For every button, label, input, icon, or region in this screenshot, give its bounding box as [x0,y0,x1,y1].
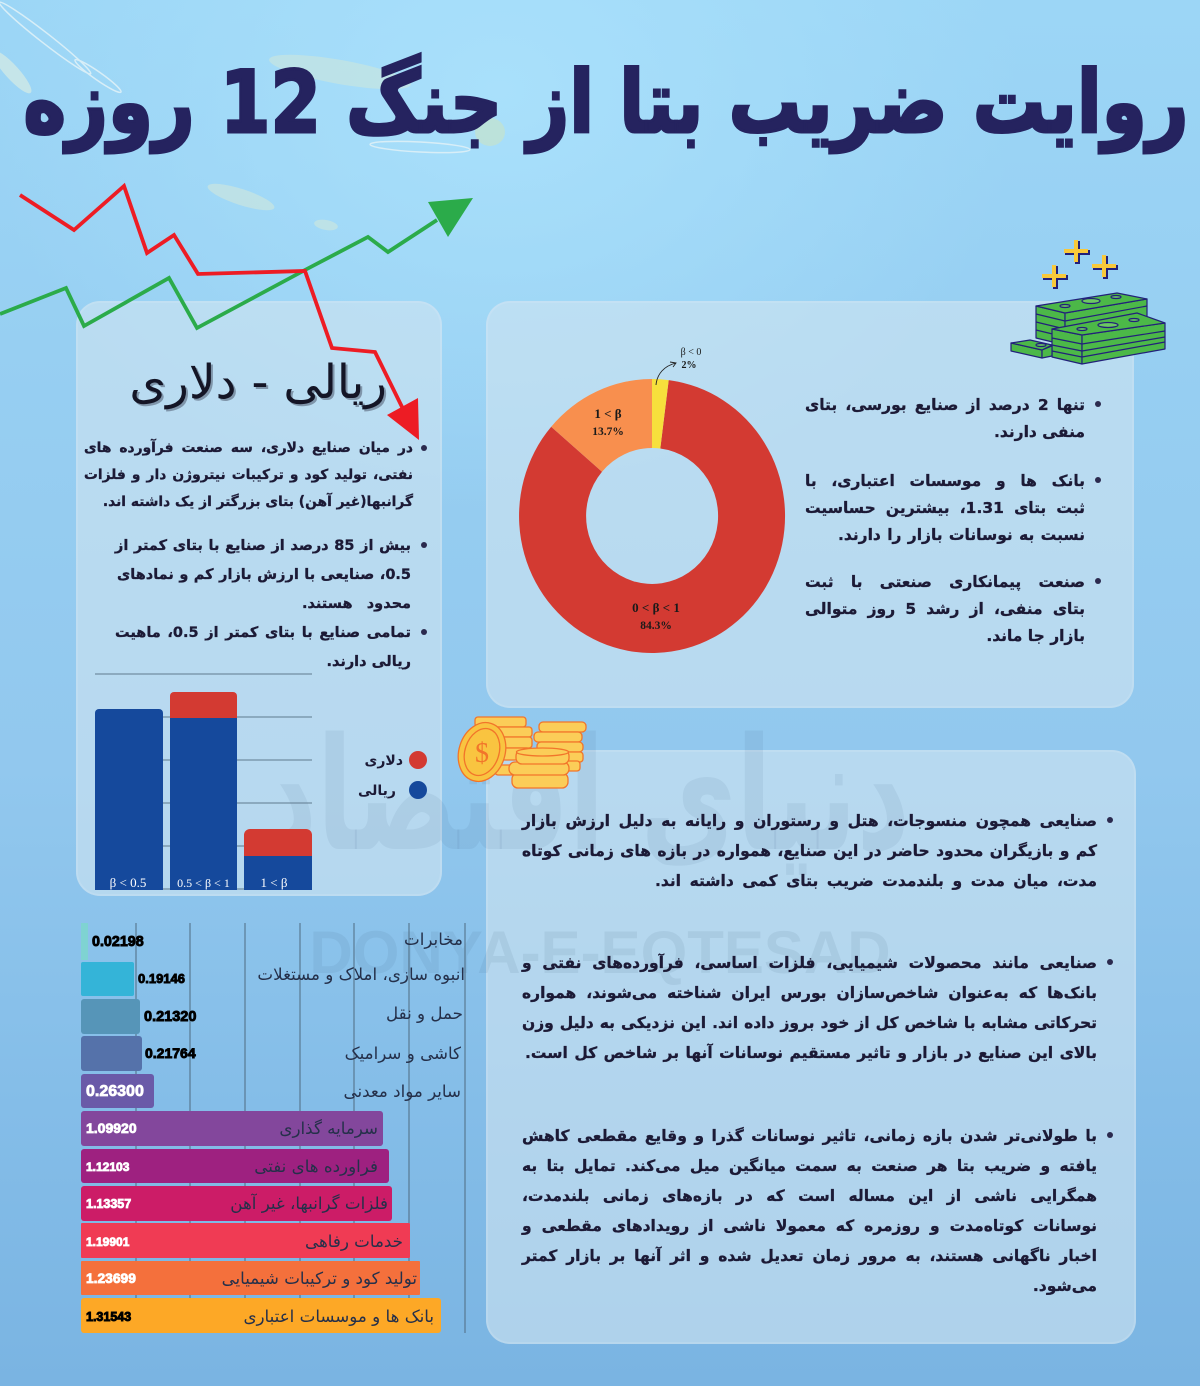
bar: banks and credit institutions [81,1298,441,1333]
paragraph: index heavyweights: صنایعی مانند محصولات شیمیایی، فلزات اساسی، فرآورده‌های نفتی و [522,954,1097,972]
bullet: contracting: صنعت پیمانکاری صنعتی با ثبت [805,573,1085,591]
paragraph: low beta sectors: صنایعی همچون منسوجات، هتل و رستوران و رایانه به دلیل ارزش بازار [522,812,1097,830]
bar: investment: سرمایه گذاری [279,1118,378,1138]
bullet: contracting: بتای منفی، از رشد 5 روز متوالی [805,600,1085,618]
bullet: contracting [805,573,1085,646]
bullet: low beta share: بیش از 85 درصد از صنایع با بتای کمتر از [115,538,411,554]
bullet: negative beta [805,396,1085,442]
bullet: rial nature: ریالی دارند. [326,654,411,670]
bar: other minerals: سایر مواد معدنی [344,1081,461,1101]
bullet: rial nature: تمامی صنایع با بتای کمتر از 0.5، ماهیت [115,625,411,641]
legend: rial: ریالی [358,783,396,799]
column: beta 0.5 to 1: 0.5 < β < 1 [177,876,230,890]
paragraph: low beta sectors: مدت، میان مدت و بلندمدت ضریب بتای کمی داشته اند. [655,872,1097,890]
paragraph: long horizon convergence: نوسانات کوتاه‌مدت و روزمره که معمولا ناشی از رویدادهای مقطعی و [522,1217,1097,1235]
bar: ceramic: کاشی و سرامیک [345,1043,461,1063]
paragraph: index heavyweights: تحرکاتی مشابه با شاخص کل از خود بروز داده اند. این نزدیکی به دلیل وزن [522,1014,1097,1032]
small note [1011,340,1052,358]
label: above 1: 13.7% [592,426,624,438]
bar: other minerals [81,1074,461,1108]
column: beta under 0.5 [95,709,163,890]
bar: oil products [81,1149,389,1183]
horizontal bar chart [81,923,466,1333]
bullet: rial nature [115,625,411,670]
slice: negative [652,379,669,448]
panel: donut [486,301,1134,708]
icon: plus signs [1042,240,1118,289]
bar: fertilizer and chemicals: 1.23699 [86,1271,136,1286]
bar: oil products: فراورده های نفتی [254,1156,378,1176]
title: روایت ضریب بتا از جنگ 12 روزه [23,53,1189,153]
front stack [1052,313,1165,364]
bar: transport: حمل و نقل [386,1003,463,1023]
paragraph: long horizon convergence [521,1126,1097,1295]
panel: rial dollar [76,301,442,896]
slice: 0 to 1 [519,380,785,653]
bullet: negative beta: تنها 2 درصد از صنایع بورسی، بتای [805,396,1085,414]
column: beta above 1: 1 < β [261,875,288,890]
bar: telecom: مخابرات [404,929,463,949]
bar: telecom [81,923,463,960]
curved arrow [656,362,676,385]
bar: fertilizer and chemicals: تولید کود و ترکیبات شیمیایی [222,1268,417,1288]
paragraph: low beta sectors: کم و بازیگران محدود حاضر در این صنایع، همواره در بازه های زمانی کوتاه [522,842,1097,860]
column: beta under 0.5: β < 0.5 [110,875,146,890]
panel: text summary [486,750,1136,1344]
bullet: negative beta: منفی دارند. [994,423,1085,441]
bar: construction: 0.19146 [138,971,185,986]
paragraph: long horizon convergence: یافته و ضریب بتا هر صنعت به سمت میانگین میل می‌کند. تمایل بتا به [522,1157,1097,1175]
slice: above 1 [551,379,652,472]
paragraph: long horizon convergence: می‌شود. [1033,1277,1097,1295]
bullet: dollar industries: در میان صنایع دلاری، سه صنعت فرآورده های [84,440,413,456]
paragraph: low beta sectors [521,812,1098,890]
paragraph: index heavyweights [521,953,1097,1062]
column: beta above 1 [244,829,312,890]
bullet: dollar industries: گرانبها(غیر آهن) بتای بزرگتر از یک داشته اند. [103,494,413,510]
bar: precious metals: فلزات گرانبها، غیر آهن [230,1192,388,1214]
stacked column chart [95,674,312,890]
bar: transport [81,999,463,1034]
donut panel bullets [805,396,1101,646]
label: 0 to 1 [632,600,680,632]
paragraph: index heavyweights: بانک‌ها که به‌عنوان شاخص‌سازان بورس ایران شناخته می‌شوند، همواره [522,984,1097,1002]
column: beta 0.5 to 1 [170,692,237,890]
decorative brush marks [0,2,505,230]
bar: precious metals [81,1186,392,1221]
heading: rial dollar: ریالی - دلاری [129,355,387,410]
bullet: dollar industries [84,438,414,510]
label: negative [681,347,701,371]
bar: telecom: 0.02198 [92,934,144,950]
watermark: دنیای اقتصاد [263,704,910,886]
bar: precious metals: 1.13357 [86,1197,131,1211]
bullet: low beta share: 0.5، صنایعی با ارزش بازار کم و نمادهای [117,567,411,583]
label: 0 to 1: 84.3% [640,620,672,632]
legend [358,751,427,799]
donut chart [519,347,786,653]
bar: construction: انبوه سازی، املاک و مستغلات [257,964,465,984]
bullet: banks: بانک ها و موسسات اعتباری، با [805,472,1085,490]
icon: gold coins [458,716,587,789]
lower panel bullets [521,812,1113,1295]
label: negative: 2% [682,360,696,371]
paragraph: long horizon convergence: با طولانی‌تر شدن بازه زمانی، تاثیر نوسانات گذرا و وقایع مقطعی کاهش [522,1127,1097,1145]
bar: construction [81,962,465,996]
bullet: contracting: بازار جا ماند. [986,627,1085,645]
label: above 1: 1 < β [594,406,622,421]
paragraph: index heavyweights: بالای این صنایع در بازار و تاثیر مستقیم نوسانات آنها بر شاخص کل است. [525,1044,1097,1062]
bar: investment: 1.09920 [86,1120,137,1136]
paragraph: long horizon convergence: همگرایی ناشی از این مساله است که در بازه‌های زمانی بلندمدت، [522,1187,1097,1205]
bar: welfare services: 1.19901 [86,1235,130,1249]
bar: fertilizer and chemicals [81,1261,420,1295]
bullet: dollar industries: نفتی، تولید کود و ترکیبات نیتروژن دار و فلزات [84,467,413,483]
bar: ceramic: 0.21764 [145,1045,196,1061]
bar: banks and credit institutions: 1.31543 [86,1310,131,1324]
green rising line [0,198,473,328]
line chart: falling red and rising green arrows [0,182,473,440]
bullet: banks: نسبت به نوسانات بازار را دارند. [838,526,1085,544]
left panel bullets [84,438,427,670]
label: 0 to 1: 0 < β < 1 [632,600,680,615]
bullet: banks: ثبت بتای 1.31، بیشترین حساسیت [805,499,1085,517]
bar: transport: 0.21320 [144,1009,196,1025]
bar: ceramic [81,1036,461,1071]
watermark latin: DONYA-E-EQTESAD [309,919,891,986]
back stack [1036,293,1147,345]
legend: dollar: دلاری [364,753,403,769]
label: negative: β < 0 [681,347,701,358]
paragraph: long horizon convergence: اخبار ناگهانی هستند، به مرور زمان تعدیل شده و اثر آنها بر بازار کمتر [522,1247,1097,1265]
bar: investment [81,1111,383,1146]
bar: banks and credit institutions: بانک ها و موسسات اعتباری [243,1306,434,1326]
bar: oil products: 1.12103 [86,1160,130,1174]
bullet: low beta share [114,538,411,612]
icon: money stack [1010,240,1166,365]
bar: other minerals: 0.26300 [86,1083,144,1100]
bullet: low beta share: محدود هستند. [302,596,411,612]
red falling line [20,186,419,440]
label: above 1 [592,406,624,438]
icon: gold coins: $ [475,738,489,769]
bar: welfare services [81,1223,410,1258]
bullet: banks [805,472,1085,544]
bar: welfare services: خدمات رفاهی [305,1231,403,1251]
